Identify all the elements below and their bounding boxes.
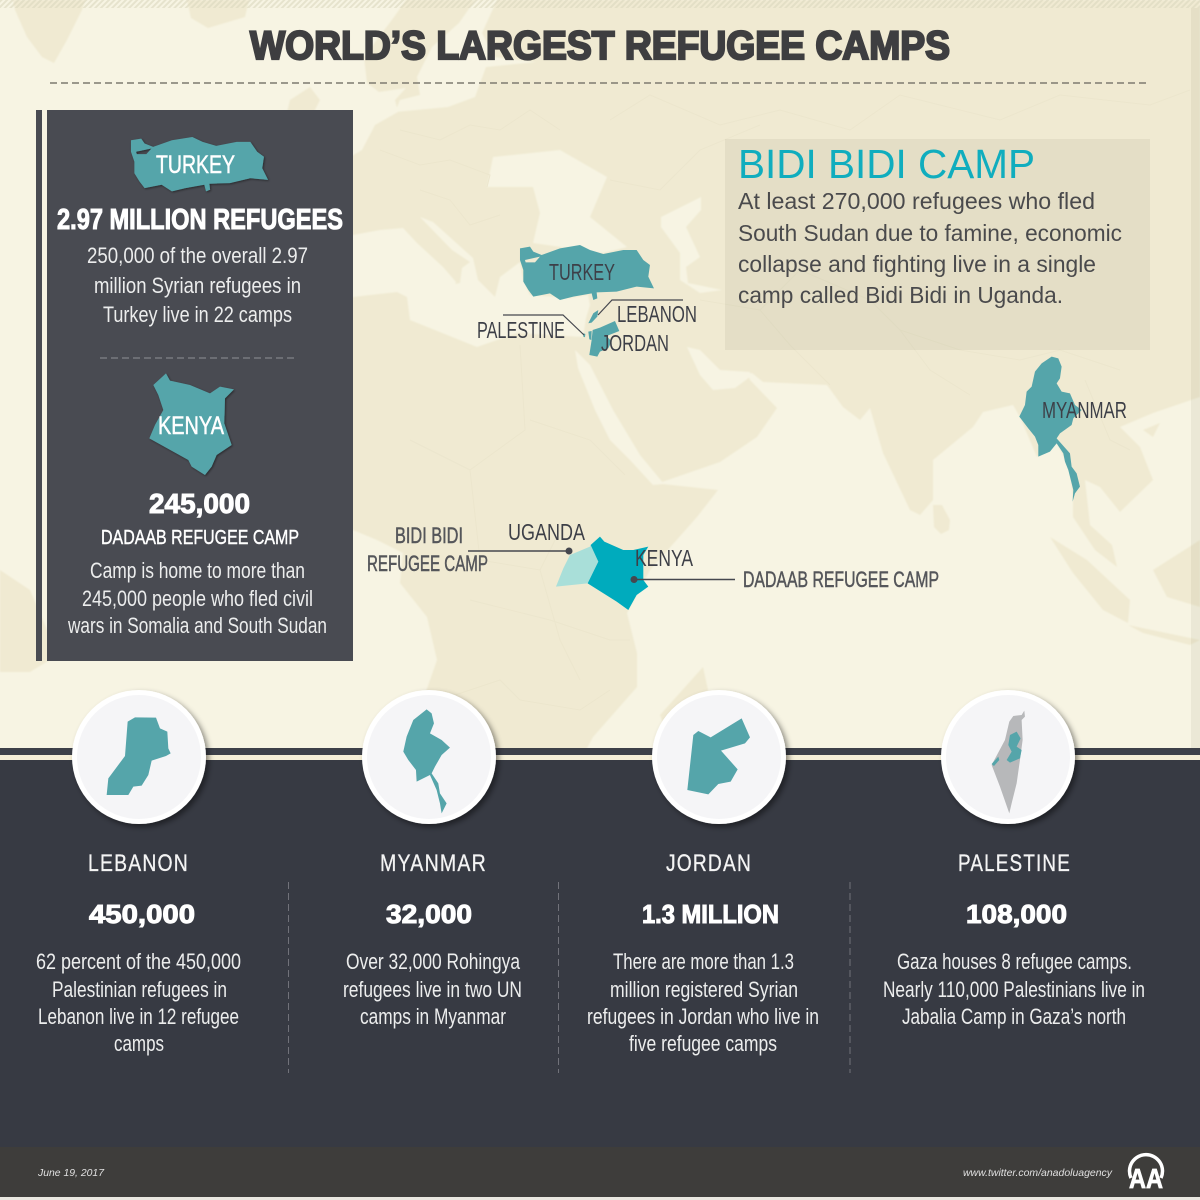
date: June 19, 2017: [37, 1168, 104, 1179]
Kenya description: 245,000 people who fled civil: [82, 586, 313, 611]
map highlight: Jordan: JORDAN: [601, 330, 669, 356]
icon: Palestine map: [941, 690, 1075, 824]
Jordan heading: JORDAN: [666, 850, 752, 877]
Kenya description: [67, 558, 327, 638]
Myanmar description: Over 32,000 Rohingya: [346, 949, 521, 974]
Palestine heading: PALESTINE: [958, 850, 1071, 877]
Lebanon description: [36, 949, 241, 1056]
column: Jordan: [587, 690, 819, 1056]
map highlight: Turkey: [520, 245, 654, 300]
Lebanon heading: LEBANON: [88, 850, 189, 877]
Turkey label: TURKEY: [156, 151, 235, 179]
map highlight: Myanmar: [1019, 357, 1127, 502]
icon: Anadolu Agency logo: AA: [1129, 1163, 1163, 1194]
callout text: collapse and fighting live in a single: [738, 251, 1096, 277]
map highlight: Turkey: TURKEY: [549, 259, 615, 285]
map highlight: Uganda and Bidi Bidi camp: REFUGEE CAMP: [367, 551, 488, 576]
Jordan description: five refugee camps: [629, 1031, 777, 1056]
Lebanon figure: 450,000: [89, 899, 195, 929]
Palestine description: Gaza houses 8 refugee camps.: [897, 949, 1132, 974]
callout heading: BIDI BIDI CAMP: [738, 141, 1035, 187]
map highlight: Lebanon: LEBANON: [617, 301, 697, 327]
Kenya description: Camp is home to more than: [90, 558, 305, 583]
Palestine description: [883, 949, 1145, 1029]
callout text: South Sudan due to famine, economic: [738, 220, 1122, 246]
map highlight: Myanmar: MYANMAR: [1042, 397, 1127, 423]
map highlight: Kenya and Dadaab camp: KENYA: [635, 545, 693, 571]
Lebanon description: Palestinian refugees in: [52, 977, 227, 1002]
column: Myanmar: [343, 690, 522, 1029]
Myanmar figure: 32,000: [386, 899, 472, 929]
map highlight: Lebanon: [588, 300, 697, 327]
map highlight: Kenya and Dadaab camp: DADAAB REFUGEE CAMP: [743, 567, 939, 592]
map highlight: Jordan: [588, 321, 669, 357]
Myanmar description: refugees live in two UN: [343, 977, 522, 1002]
callout text: At least 270,000 refugees who fled: [738, 188, 1095, 214]
column: Palestine: [883, 690, 1145, 1029]
icon: Kenya map: [149, 373, 234, 475]
Jordan description: There are more than 1.3: [613, 949, 794, 974]
map highlight: Palestine: PALESTINE: [477, 317, 565, 343]
callout text: camp called Bidi Bidi in Uganda.: [738, 282, 1063, 308]
panel: bottom country statistics: [0, 690, 1200, 1147]
Lebanon description: Lebanon live in 12 refugee: [38, 1004, 239, 1029]
Turkey description: million Syrian refugees in: [94, 273, 301, 298]
callout text: [738, 188, 1122, 308]
Myanmar description: [343, 949, 522, 1029]
map highlight: Uganda and Bidi Bidi camp: BIDI BIDI: [395, 523, 463, 548]
icon: Myanmar map: [362, 690, 496, 824]
column: Lebanon: [36, 690, 241, 1056]
Turkey description: Turkey live in 22 camps: [103, 302, 292, 327]
Turkey description: [87, 243, 308, 327]
Palestine figure: 108,000: [966, 899, 1067, 929]
Lebanon description: 62 percent of the 450,000: [36, 949, 241, 974]
source link: www.twitter.com/anadoluagency: [963, 1167, 1113, 1179]
Myanmar description: camps in Myanmar: [360, 1004, 506, 1029]
Turkey description: 250,000 of the overall 2.97: [87, 243, 308, 268]
Kenya figure: 245,000: [149, 488, 250, 519]
map highlight: Uganda and Bidi Bidi camp: [367, 519, 598, 587]
icon: Lebanon map: [72, 690, 206, 824]
footer: [0, 1147, 1200, 1200]
title: WORLD’S LARGEST REFUGEE CAMPS: [250, 24, 950, 68]
Lebanon description: camps: [114, 1031, 164, 1056]
icon: Anadolu Agency logo: [1129, 1155, 1163, 1194]
Jordan figure: 1.3 MILLION: [642, 899, 779, 929]
map highlight: Kenya and Dadaab camp: [588, 537, 939, 610]
callout: Bidi Bidi camp: [725, 139, 1150, 350]
Jordan description: [587, 949, 819, 1056]
Jordan description: million registered Syrian: [610, 977, 798, 1002]
Turkey figure: 2.97 MILLION REFUGEES: [57, 204, 343, 236]
icon: Turkey map: [131, 137, 268, 191]
Kenya description: wars in Somalia and South Sudan: [67, 613, 327, 638]
icon: Jordan map: [652, 690, 786, 824]
map highlight: Uganda and Bidi Bidi camp: UGANDA: [508, 519, 586, 545]
Jordan description: refugees in Jordan who live in: [587, 1004, 819, 1029]
Myanmar heading: MYANMAR: [380, 850, 487, 877]
Kenya camp name: DADAAB REFUGEE CAMP: [101, 527, 299, 549]
Kenya label: KENYA: [158, 412, 224, 440]
panel: Turkey and Kenya: [36, 110, 353, 661]
Palestine description: Jabalia Camp in Gaza’s north: [902, 1004, 1126, 1029]
